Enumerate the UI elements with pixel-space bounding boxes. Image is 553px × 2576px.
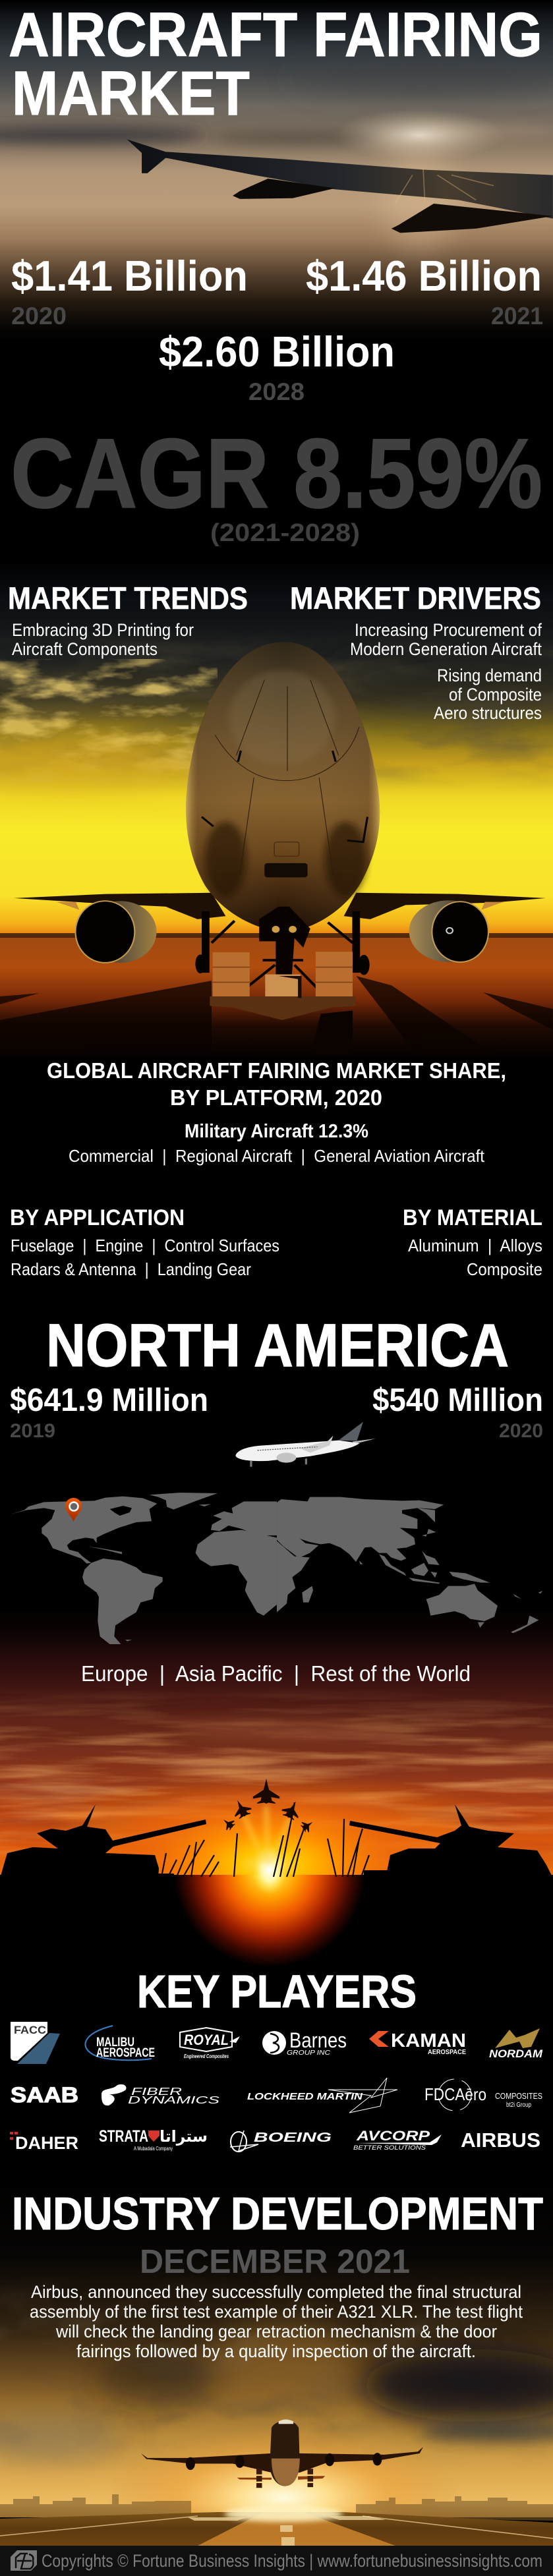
text: development description <box>30 2282 523 2361</box>
logo: Avcorp: AVCORP <box>356 2129 430 2144</box>
text: development description: Airbus, announced they successfully completed the final structural <box>31 2282 521 2302</box>
logo: FDC Aero Composites: COMPOSITES <box>495 2091 542 2101</box>
map: eastern hemisphere <box>277 1497 542 1633</box>
text: market trends detail: Embracing 3D Printing for <box>12 620 194 640</box>
logo: Kaman Aerospace <box>369 2030 466 2056</box>
logo: Airbus: AIRBUS <box>461 2129 540 2152</box>
logo: Strata <box>99 2127 208 2152</box>
right tank silhouette <box>349 1804 553 1878</box>
text: market drivers detail: Aero structures <box>434 703 542 723</box>
logo: Malibu Aerospace <box>85 2026 155 2060</box>
text: material segments: Aluminum | Alloys <box>408 1236 542 1255</box>
icon: Fortune Business Insights logo <box>11 2550 37 2571</box>
text: development description: assembly of the first test example of their A321 XLR. The test flight <box>30 2302 523 2322</box>
text: application segments: Radars & Antenna | Landing Gear <box>11 1259 251 1279</box>
logo: Barnes Group: GROUP INC <box>287 2049 331 2057</box>
heading: by application: BY APPLICATION <box>10 1205 185 1230</box>
fuselage <box>186 642 380 932</box>
stat: 2028 market size <box>159 328 395 405</box>
heading: market trends: MARKET TRENDS <box>8 581 248 615</box>
logo: Fiber Dynamics: FIBER <box>131 2086 183 2098</box>
text: market drivers detail: Rising demand <box>437 666 542 685</box>
runway <box>0 2512 553 2546</box>
heading: by material: BY MATERIAL <box>403 1205 542 1230</box>
text: platform segments: Commercial | Regional Aircraft | General Aviation Aircraft <box>69 1146 485 1166</box>
landing gear struts <box>195 911 370 975</box>
stat: 2021 market size: 2021 <box>491 302 543 329</box>
logo: Malibu Aerospace: AEROSPACE <box>96 2046 155 2060</box>
stat: 2021 market size <box>306 252 543 329</box>
logo: Boeing <box>230 2131 332 2152</box>
text: material segments: Composite <box>467 1259 542 1279</box>
stat: 2020 market size: 2020 <box>11 302 67 329</box>
logo: Lockheed Martin <box>247 2078 397 2113</box>
logo: Avcorp <box>353 2129 442 2152</box>
logo: Nordam <box>489 2028 543 2060</box>
logo: Fiber Dynamics <box>102 2084 220 2106</box>
logo: Boeing: BOEING <box>254 2131 332 2145</box>
left tank silhouette <box>0 1804 206 1878</box>
logo: Royal Engineered Composites <box>180 2028 240 2059</box>
logo: Malibu Aerospace: MALIBU <box>96 2036 134 2049</box>
logo: Strata: A Mubadala Company <box>134 2146 173 2152</box>
stat: 2021 market size: $1.46 Billion <box>306 252 542 300</box>
panel: sunset airport with airliner <box>0 560 553 1060</box>
jets <box>219 1779 316 1834</box>
nose gear and cargo boxes <box>210 907 355 1054</box>
heading: platform share: BY PLATFORM, 2020 <box>170 1085 382 1110</box>
logo: Strata: STRATA <box>99 2127 148 2146</box>
logo: FDC Aero Composites <box>424 2079 542 2111</box>
logo: Royal Engineered Composites: Engineered Composites <box>184 2053 229 2059</box>
stat: 2028 market size: 2028 <box>248 378 305 405</box>
stat: 2020 market size: $1.41 Billion <box>11 252 248 300</box>
logo: Kaman Aerospace: AEROSPACE <box>428 2049 466 2056</box>
logo: Daher: DAHER <box>15 2133 78 2153</box>
stat: 2020 market size <box>11 252 248 329</box>
panel: sunset battlefield <box>0 1608 553 1980</box>
text: market drivers detail: of Composite <box>449 685 542 704</box>
city skyline <box>0 2494 553 2521</box>
panel: runway takeoff scene <box>0 2257 553 2546</box>
map: western hemisphere <box>11 1493 277 1644</box>
logo: Kaman Aerospace: KAMAN <box>391 2030 466 2051</box>
title <box>9 0 542 129</box>
logo: FDC Aero Composites: FDCAēro <box>424 2084 486 2104</box>
logo: Avcorp: BETTER SOLUTIONS <box>353 2144 426 2152</box>
heading: key players: KEY PLAYERS <box>137 1966 417 2017</box>
logo: Nordam: NORDAM <box>489 2047 543 2060</box>
panel: hero sky with airplane wing <box>0 0 553 343</box>
text: development description: will check the landing gear retraction mechanism & the door <box>55 2322 497 2341</box>
text: development description: fairings followed by a quality inspection of the aircraft. <box>76 2341 476 2361</box>
heading: platform share: GLOBAL AIRCRAFT FAIRING MARKET SHARE, <box>47 1058 506 1083</box>
wings <box>14 893 546 919</box>
icon: location pin <box>65 1498 82 1522</box>
airliner taking off <box>141 2420 423 2488</box>
logos: key players <box>10 2022 543 2153</box>
text: application segments: Fuselage | Engine | Control Surfaces <box>11 1236 279 1255</box>
logo: Royal Engineered Composites: ROYAL <box>184 2032 229 2048</box>
logo: Fiber Dynamics: DYNAMICS <box>128 2095 220 2106</box>
text: market trends detail: Aircraft Components <box>12 639 158 659</box>
text: date: DECEMBER 2021 <box>140 2243 410 2280</box>
airliner front view <box>0 642 553 1054</box>
title: MARKET <box>12 59 250 129</box>
stat: North America 2019: 2019 <box>10 1420 55 1442</box>
logo: FACC: FACC <box>14 2024 46 2036</box>
text: other regions: Europe | Asia Pacific | Rest of the World <box>81 1661 471 1686</box>
stat: North America 2020 <box>372 1383 543 1442</box>
text: market trends detail <box>12 620 194 659</box>
panel: footer <box>0 2546 553 2576</box>
airplane wing silhouette <box>127 139 553 233</box>
stat: North America 2019 <box>10 1383 208 1442</box>
icon: white airplane <box>235 1422 376 1467</box>
stat: North America 2019: $641.9 Million <box>10 1383 208 1418</box>
text: material segments <box>408 1236 542 1279</box>
logo: Barnes Group: Barnes <box>289 2028 347 2052</box>
engines <box>75 900 488 963</box>
stat: North America 2020: $540 Million <box>372 1383 543 1418</box>
jet exhaust trails <box>244 1806 290 1865</box>
text: application segments <box>11 1236 279 1279</box>
heading: North America: NORTH AMERICA <box>46 1312 509 1379</box>
logo: Saab: SAAB <box>11 2083 78 2107</box>
ground shadows <box>0 976 553 1054</box>
stat: military aircraft share: Military Aircraft 12.3% <box>185 1121 368 1142</box>
logo: Strata: ستراتا <box>160 2127 208 2146</box>
logo: Lockheed Martin: LOCKHEED MARTIN <box>247 2091 363 2102</box>
world map <box>11 1493 542 1644</box>
stat: CAGR: (2021-2028) <box>210 519 360 547</box>
stat: North America 2020: 2020 <box>499 1420 543 1442</box>
heading: platform share <box>47 1058 506 1110</box>
logo: Barnes Group <box>262 2028 347 2057</box>
logo: FDC Aero Composites: bt2i Group <box>506 2102 531 2109</box>
stat: 2028 market size: $2.60 Billion <box>159 328 395 376</box>
grass silhouette <box>161 1802 369 1877</box>
text: market drivers detail <box>350 620 542 723</box>
logo: FACC <box>11 2022 60 2064</box>
